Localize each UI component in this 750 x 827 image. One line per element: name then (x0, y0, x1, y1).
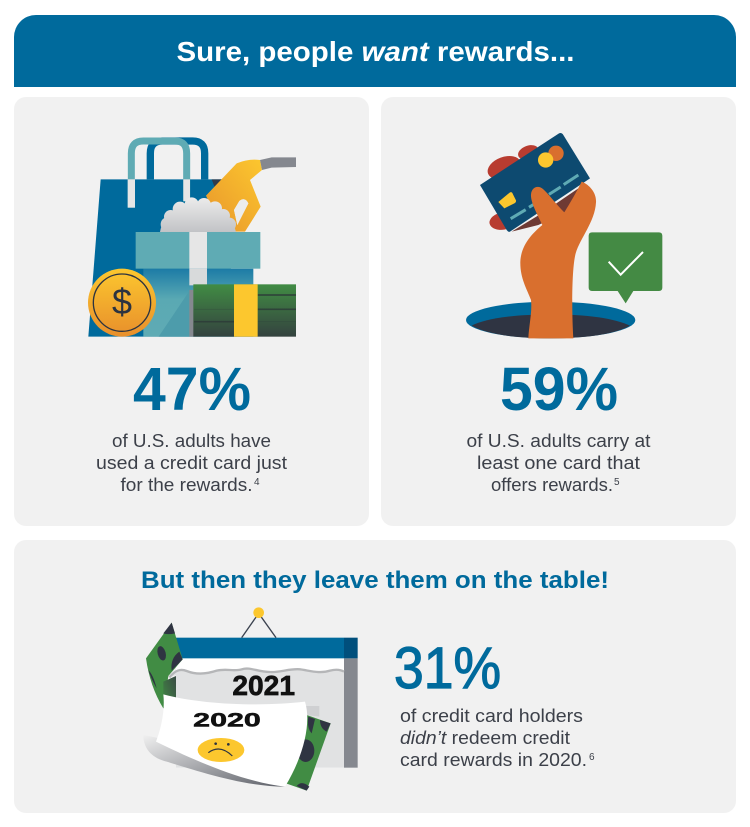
text: of U.S. adults have used a credit card just for the rewards (96, 430, 287, 495)
text: of U.S. adults have used a credit card just for the rewards: used a credit card just (96, 452, 287, 473)
heading: Sure, people want rewards: Sure, people want rewards... (176, 36, 574, 67)
sub-element: tissue paper (160, 202, 236, 232)
heading: But then they leave them on the table: But then they leave them on the table! (141, 567, 609, 594)
text: of credit card holders didn't redeem credit card rewards in 2020: card rewards in 2020. (400, 749, 587, 770)
text: of credit card holders didn't redeem credit card rewards in 2020: of credit card holders (400, 705, 583, 726)
panel: 59% rewards (381, 97, 736, 526)
panel: left on the table (14, 540, 736, 813)
icon: wall calendar with 2020 page peeling, cash behind (143, 607, 358, 791)
stat: 31%: 31% (394, 636, 501, 701)
text: of U.S. adults carry at least one card that offers rewards: least one card that (477, 452, 640, 473)
text: of U.S. adults carry at least one card that offers rewards: offers rewards. (491, 474, 613, 495)
icon: hand holding credit card from a hole, with check bubble (466, 133, 662, 338)
text: of credit card holders didn't redeem credit card rewards in 2020: didn’t redeem credit (400, 727, 570, 748)
stat: 59%: 59% (500, 355, 618, 423)
panel: 47% rewards (14, 97, 369, 526)
text: of U.S. adults have used a credit card just for the rewards: for the rewards. (120, 474, 252, 495)
text: of credit card holders didn't redeem credit card rewards in 2020 (400, 705, 595, 770)
icon: wall calendar with 2020 page peeling, cash behind: 2021 (232, 670, 295, 701)
icon: shopping bag, fuel nozzle, gift, coin and cash: $ (112, 281, 132, 322)
text: of U.S. adults have used a credit card just for the rewards: of U.S. adults have (112, 430, 271, 451)
icon: wall calendar with 2020 page peeling, cash behind: 2020 (193, 711, 261, 732)
text: of U.S. adults have used a credit card just for the rewards: 4 (254, 477, 260, 488)
text: of U.S. adults carry at least one card that offers rewards (466, 430, 650, 495)
icon: shopping bag, fuel nozzle, gift, coin and cash (88, 141, 296, 337)
text: of U.S. adults carry at least one card that offers rewards: of U.S. adults carry at (466, 430, 650, 451)
stat: 47%: 47% (133, 355, 251, 423)
text: of U.S. adults carry at least one card that offers rewards: 5 (614, 477, 620, 488)
header banner (14, 15, 736, 87)
text: of credit card holders didn't redeem credit card rewards in 2020: 6 (589, 752, 595, 763)
